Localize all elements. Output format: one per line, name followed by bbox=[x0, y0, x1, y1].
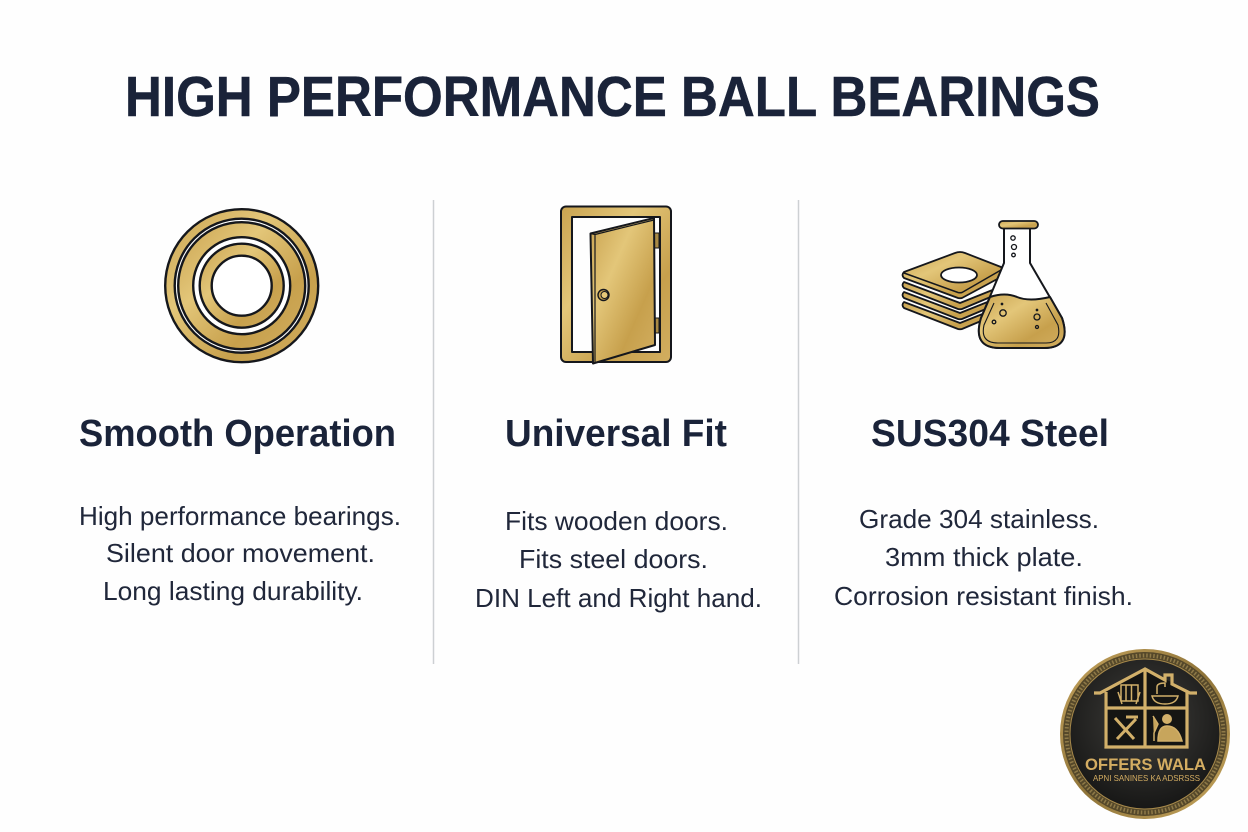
logo badge: offers wala bbox=[1060, 649, 1230, 819]
text: smooth operation details: High performance bearings. bbox=[79, 501, 401, 531]
text: universal fit details: Fits steel doors. bbox=[519, 544, 708, 574]
brand name: OFFERS WALA bbox=[1085, 755, 1206, 774]
text: smooth operation details: Silent door movement. bbox=[106, 538, 375, 568]
text: sus304 steel details bbox=[834, 504, 1133, 611]
text: sus304 steel details: Corrosion resistant finish. bbox=[834, 581, 1133, 611]
text: universal fit details: DIN Left and Right hand. bbox=[475, 583, 762, 613]
title: HIGH PERFORMANCE BALL BEARINGS bbox=[125, 65, 1100, 129]
text: sus304 steel details: 3mm thick plate. bbox=[885, 542, 1083, 572]
panel: smooth operation bbox=[79, 209, 401, 606]
heading: smooth operation: Smooth Operation bbox=[79, 413, 396, 455]
panel: sus304 steel bbox=[834, 221, 1133, 611]
text: universal fit details: Fits wooden doors. bbox=[505, 506, 728, 536]
icon: door bbox=[561, 206, 671, 364]
panel: universal fit bbox=[475, 206, 762, 613]
text: universal fit details bbox=[475, 506, 762, 613]
icon: steel plates and flask bbox=[902, 221, 1065, 348]
text: smooth operation details bbox=[79, 501, 401, 606]
text: smooth operation details: Long lasting durability. bbox=[103, 576, 363, 606]
text: sus304 steel details: Grade 304 stainless. bbox=[859, 504, 1099, 534]
heading: universal fit: Universal Fit bbox=[505, 413, 727, 455]
icon: bearing bbox=[165, 209, 318, 362]
heading: sus304 steel: SUS304 Steel bbox=[871, 413, 1109, 455]
tagline: APNI SANINES KA ADSRSSS bbox=[1093, 773, 1200, 783]
icon: house with four tiles bbox=[1094, 669, 1197, 747]
